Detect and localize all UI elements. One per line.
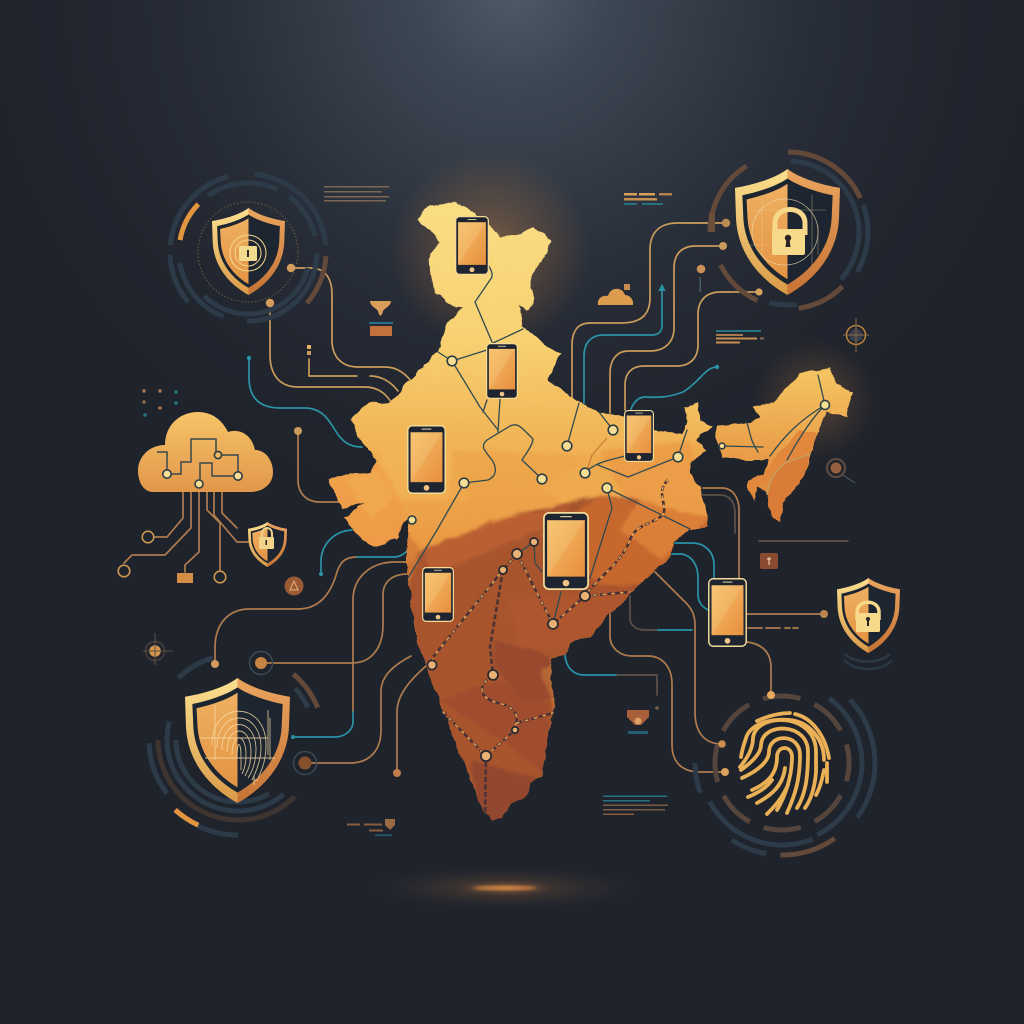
map: northeast India bbox=[715, 368, 853, 523]
map facets: southern peninsula bbox=[395, 495, 720, 830]
cloud with circuit bbox=[118, 412, 273, 583]
icon: lower funnel bbox=[627, 706, 659, 734]
icon: brown badge bbox=[284, 576, 304, 596]
text lines: top left bbox=[324, 186, 389, 202]
shield A: top left with rings bbox=[138, 142, 358, 362]
map: dotted southern routes bbox=[432, 480, 668, 815]
map: network nodes bbox=[408, 356, 683, 761]
icon: left crosshair bbox=[143, 633, 173, 665]
icon: top left funnel bbox=[369, 301, 393, 336]
phone: offshore east bbox=[709, 579, 746, 646]
shield B connectors bbox=[660, 213, 763, 369]
text lines: right middle bbox=[716, 330, 764, 344]
icon: pin bbox=[697, 265, 705, 292]
map: India mainland bbox=[328, 201, 720, 830]
shield D: right padlock shield bbox=[820, 578, 900, 669]
text lines: bottom left bbox=[347, 819, 395, 836]
text lines: top right bbox=[624, 193, 672, 205]
icon: magnifier ring bbox=[827, 459, 855, 483]
phone: west bbox=[408, 426, 445, 493]
shield C: bottom left fingerprint shield bbox=[113, 615, 363, 865]
connection routes: left side bbox=[215, 268, 426, 773]
text lines: bottom right bbox=[603, 796, 668, 815]
icon: small cloud bbox=[598, 284, 633, 305]
phone: Kashmir bbox=[456, 217, 488, 274]
icon: brown square bbox=[760, 553, 778, 569]
fingerprint with rings bbox=[651, 632, 913, 894]
phone: north bbox=[487, 344, 517, 398]
shield B: top right with rings bbox=[679, 123, 897, 341]
phone: central south bbox=[544, 513, 588, 589]
map: solid network lines bbox=[408, 265, 690, 578]
connection routes: right side bbox=[565, 223, 848, 772]
phone: north east bbox=[625, 411, 653, 461]
icon: dot matrix bbox=[142, 389, 178, 417]
phone: south west bbox=[423, 568, 453, 621]
shield C connectors bbox=[211, 427, 401, 777]
map facets: western and central tones bbox=[328, 440, 708, 547]
shield A connectors bbox=[247, 264, 311, 360]
icon: crosshair right bbox=[843, 318, 869, 352]
fingerprint ridges bbox=[740, 713, 829, 814]
shield E: small padlock shield by cloud bbox=[248, 522, 287, 567]
